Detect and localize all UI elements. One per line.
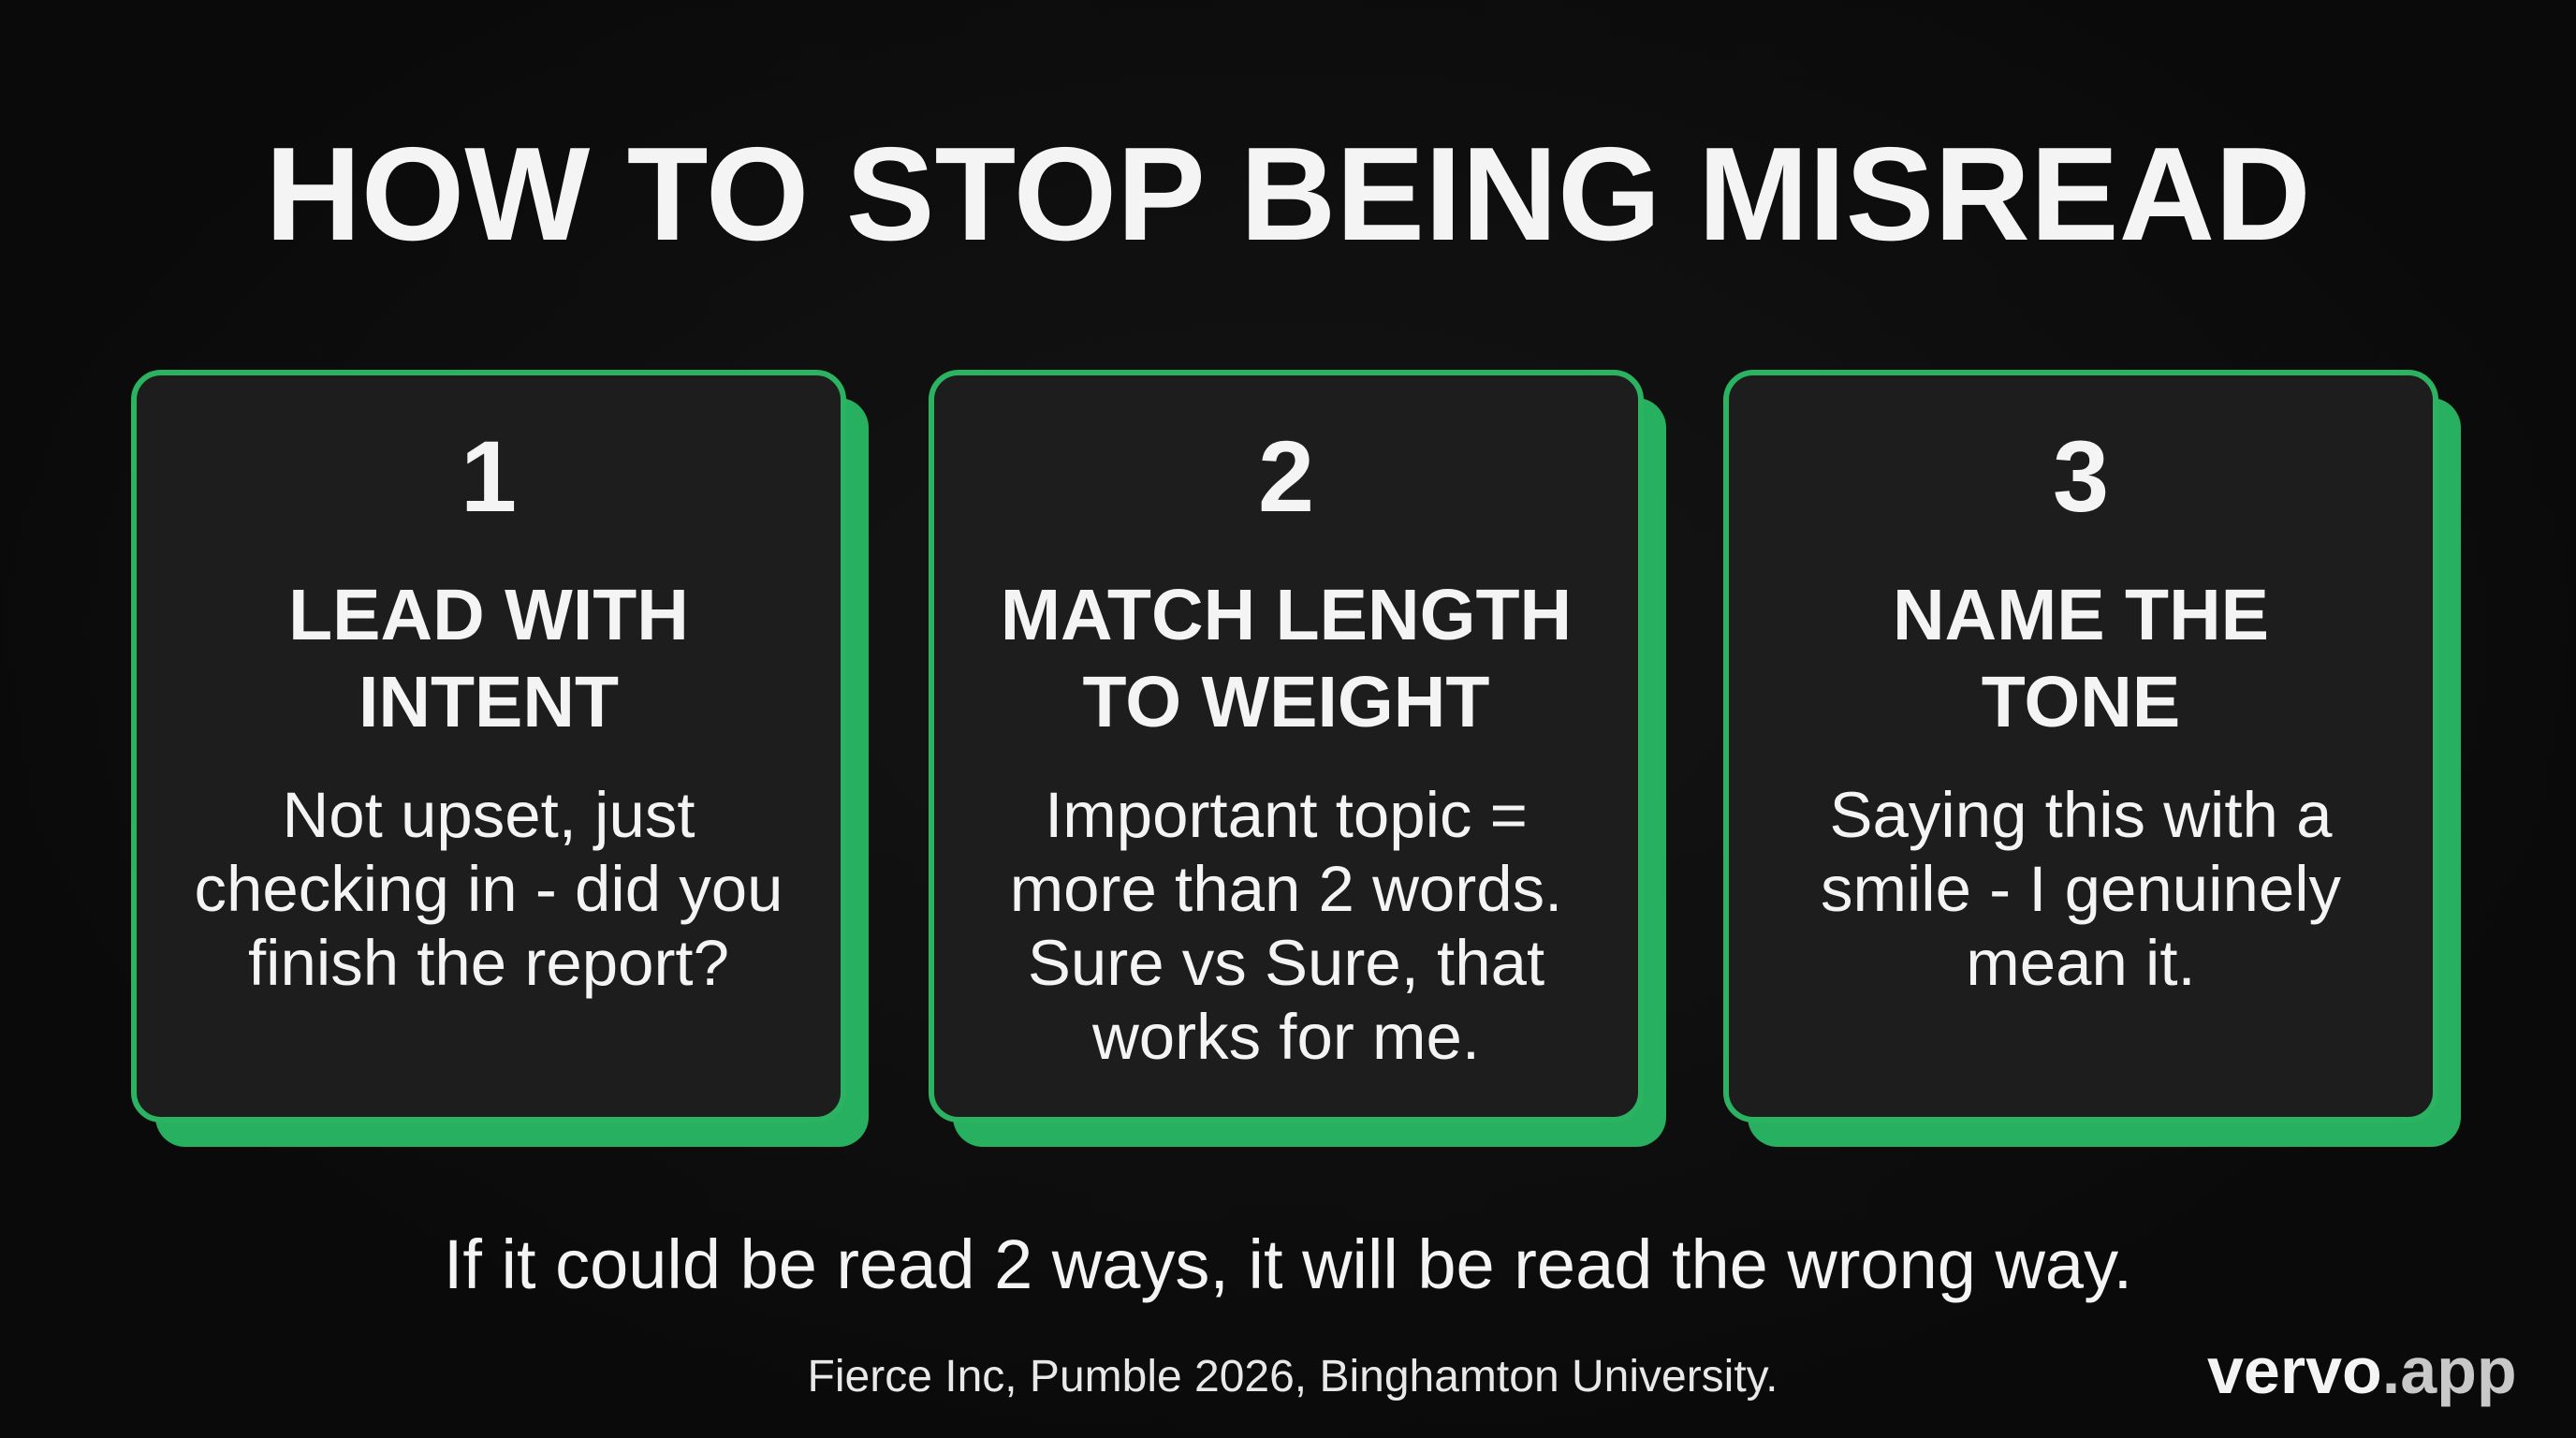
panel: card 1 — [131, 370, 869, 1147]
body 1: checking in - did you — [194, 853, 783, 925]
heading 1: LEAD WITH — [288, 575, 689, 655]
body 2: Important topic = — [1045, 779, 1528, 851]
heading 1 — [288, 575, 689, 742]
number 3: 3 — [2053, 419, 2109, 533]
body 3 — [1821, 779, 2341, 999]
body 3: Saying this with a — [1830, 779, 2332, 851]
body 2: more than 2 words. — [1010, 853, 1562, 925]
body 2: works for me. — [1092, 1001, 1480, 1073]
body 2: Sure vs Sure, that — [1028, 927, 1544, 999]
heading 2: MATCH LENGTH — [1001, 575, 1572, 655]
body 2 — [1010, 779, 1562, 1073]
heading 3: TONE — [1982, 662, 2180, 742]
body 1: Not upset, just — [282, 779, 695, 851]
body 1 — [194, 779, 783, 999]
number 1: 1 — [461, 419, 517, 533]
heading 2: TO WEIGHT — [1083, 662, 1489, 742]
heading 3 — [1893, 575, 2269, 742]
number 2: 2 — [1258, 419, 1314, 533]
title: HOW TO STOP BEING MISREAD — [265, 120, 2311, 269]
heading 1: INTENT — [359, 662, 619, 742]
body 1: finish the report? — [248, 927, 729, 999]
logo: vervo.app — [2207, 1334, 2517, 1407]
panel: card 3 — [1723, 370, 2461, 1147]
body 3: mean it. — [1966, 927, 2196, 999]
heading 3: NAME THE — [1893, 575, 2269, 655]
heading 2 — [1001, 575, 1572, 742]
panel: card 2 — [929, 370, 1666, 1147]
sources: Fierce Inc, Pumble 2026, Binghamton University. — [808, 1352, 1778, 1401]
body 3: smile - I genuinely — [1821, 853, 2341, 925]
tagline: If it could be read 2 ways, it will be read the wrong way. — [444, 1225, 2132, 1303]
